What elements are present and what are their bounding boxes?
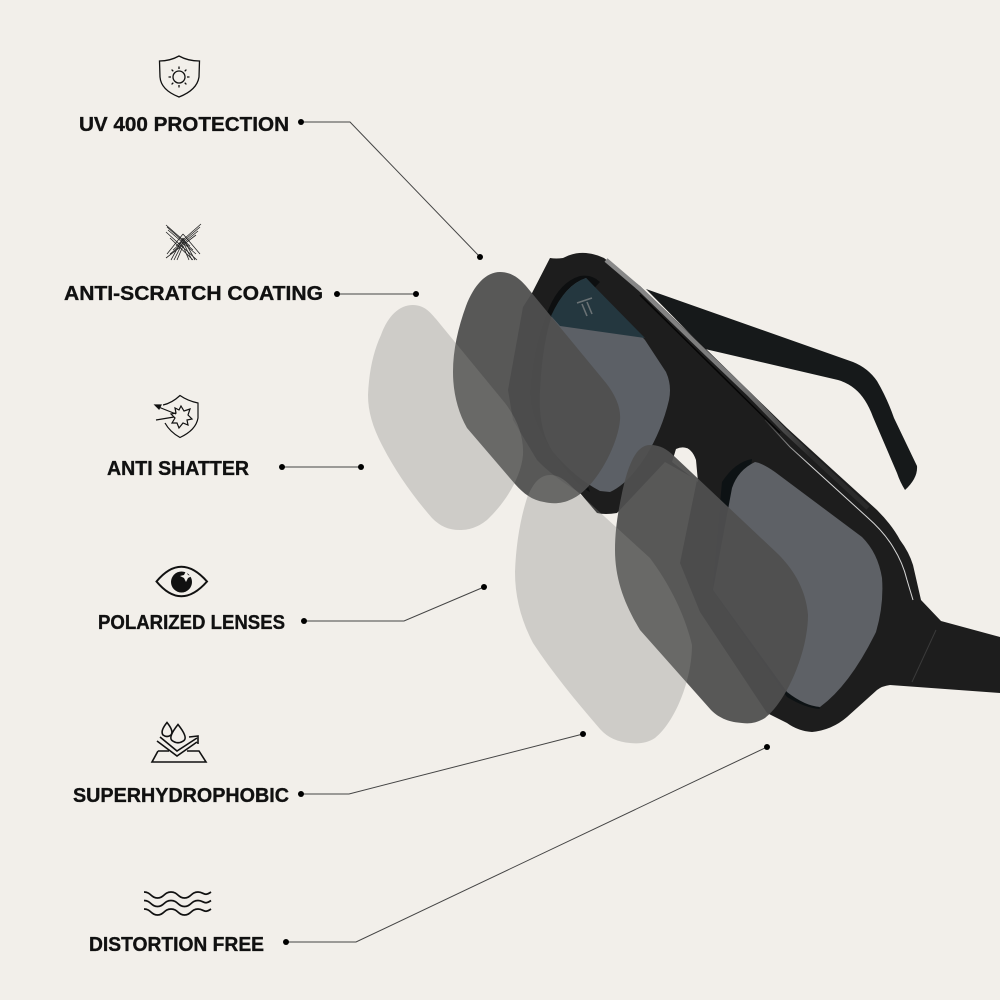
light lens layer left <box>368 305 523 530</box>
icon: eye <box>156 567 207 596</box>
frame inner dark line <box>640 295 780 433</box>
left lens teal reflection <box>551 278 645 338</box>
label: UV 400 protection: UV 400 PROTECTION <box>79 114 289 136</box>
callout line: polarized lenses <box>301 584 487 624</box>
callout line: anti shatter <box>279 464 364 470</box>
dark lens layer left <box>453 272 620 503</box>
callout line: UV 400 protection <box>298 119 483 260</box>
left lens rim <box>530 276 600 492</box>
icon: shield with shatter burst <box>155 396 198 438</box>
frame top highlight <box>606 260 868 508</box>
icon: UV shield with sun <box>160 56 200 97</box>
label: distortion free: DISTORTION FREE <box>89 934 264 956</box>
label: anti-scratch coating: ANTI-SCRATCH COATING <box>64 283 323 305</box>
icon: scratches <box>166 224 201 260</box>
right lens glass <box>713 462 882 707</box>
right lens rim <box>712 459 820 709</box>
lens logo <box>577 298 592 316</box>
far temple arm <box>646 289 917 490</box>
bridge hole <box>672 447 698 482</box>
callout line: anti-scratch coating <box>334 291 419 297</box>
callout line: distortion free <box>283 744 770 945</box>
frame edge highlight <box>765 420 913 600</box>
callout line: superhydrophobic <box>298 731 586 797</box>
label: superhydrophobic: SUPERHYDROPHOBIC <box>73 785 289 807</box>
frame front <box>508 253 1000 732</box>
left lens glass <box>540 278 670 492</box>
icon: water drops on surface <box>152 722 206 762</box>
light lens layer right <box>515 475 692 743</box>
dark lens layer right <box>615 445 808 723</box>
temple hinge crease <box>912 630 936 682</box>
label: anti shatter: ANTI SHATTER <box>107 458 250 480</box>
icon: waves <box>144 892 211 915</box>
sunglasses illustration <box>368 253 1000 743</box>
label: polarized lenses: POLARIZED LENSES <box>98 612 285 634</box>
